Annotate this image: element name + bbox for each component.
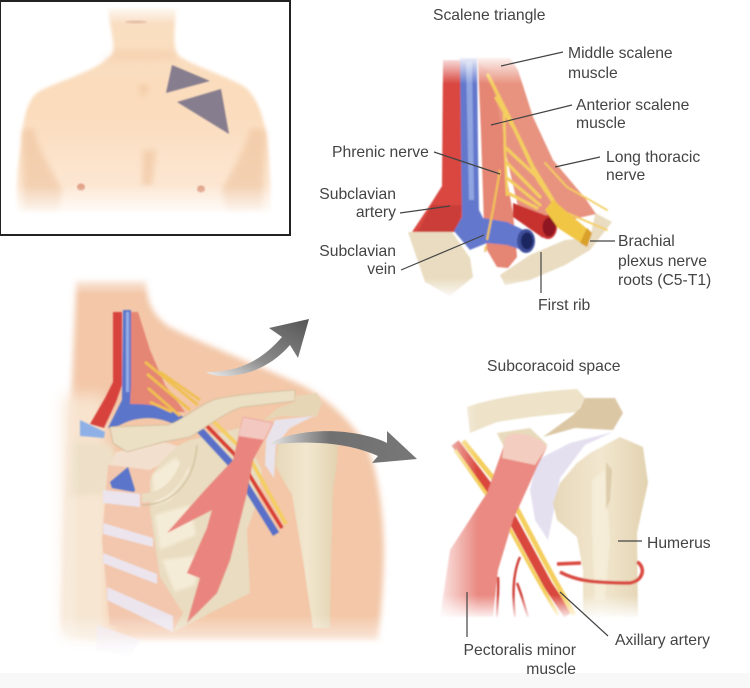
artery opening <box>539 215 557 239</box>
axillary vessels <box>198 420 286 534</box>
label: humerus <box>618 535 711 552</box>
label: axillary artery <box>560 592 710 649</box>
overview nerves <box>145 362 200 416</box>
thoracic wall <box>102 465 185 630</box>
scapula and ribs <box>150 428 262 632</box>
nerve bundle end <box>545 200 592 247</box>
detail glenoid <box>530 432 613 540</box>
heading: scalene triangle: Scalene triangle <box>433 7 546 24</box>
nipples <box>77 184 85 190</box>
label: first rib: First rib <box>538 297 591 314</box>
first rib left <box>408 232 473 296</box>
gap under vein <box>472 248 487 258</box>
phrenic nerve <box>485 170 500 252</box>
chest pale skin <box>62 395 112 640</box>
scalene top fade <box>420 54 530 84</box>
label: pectoralis minor muscle <box>464 592 576 678</box>
anterior scalene muscle <box>478 62 517 268</box>
detail humerus <box>553 437 648 617</box>
vein opening <box>517 229 535 253</box>
label: humerus: Humerus <box>647 535 711 552</box>
subclavian artery <box>412 60 464 232</box>
label: pectoralis minor muscle: muscle <box>526 661 576 678</box>
torso bottom fade <box>5 185 280 219</box>
artery branches <box>497 557 528 617</box>
detail pectoralis minor <box>440 437 547 617</box>
lower sternum <box>64 495 104 640</box>
lips <box>125 20 147 24</box>
brachial plexus roots <box>488 75 607 232</box>
icon: scalene triangle marker <box>166 65 210 93</box>
humerus <box>275 432 338 628</box>
upper coracoid curve <box>142 445 188 498</box>
label: brachial plexus nerve roots: roots (C5-T1) <box>618 272 711 289</box>
axillary artery <box>455 443 568 615</box>
circumflex artery loop <box>557 562 642 583</box>
label: subclavian artery: Subclavian <box>319 186 396 203</box>
blue vessel window <box>110 467 135 492</box>
detail left fade <box>430 385 478 625</box>
arrow: to subcoracoid space <box>271 431 417 463</box>
label: anterior scalene muscle <box>491 97 690 132</box>
cut artery branch <box>513 203 550 238</box>
label: phrenic nerve <box>332 144 500 174</box>
label: long thoracic nerve: nerve <box>606 167 646 184</box>
label: axillary artery: Axillary artery <box>615 632 710 649</box>
label: middle scalene muscle <box>501 45 673 82</box>
sternum <box>70 440 118 498</box>
panel: torso locator inset <box>0 1 290 235</box>
first rib right <box>500 198 612 285</box>
shoulder bottom fade <box>30 615 390 660</box>
neck highlight <box>60 272 170 294</box>
bottom off-white strip <box>0 673 750 688</box>
acromion <box>262 393 322 422</box>
axillary nerves <box>455 441 574 615</box>
upper chest bone <box>110 442 190 470</box>
neck fade <box>100 4 185 24</box>
torso shading <box>22 50 266 212</box>
label: middle scalene muscle: Middle scalene <box>568 45 673 62</box>
label: middle scalene muscle: muscle <box>568 65 618 82</box>
label: brachial plexus nerve roots: Brachial <box>618 233 675 250</box>
rib cartilage <box>96 490 173 656</box>
label: first rib <box>538 252 591 314</box>
label: brachial plexus nerve roots: plexus nerve <box>618 253 707 270</box>
panel: subcoracoid space illustration <box>430 385 648 625</box>
label: long thoracic nerve: Long thoracic <box>606 149 700 166</box>
label: anterior scalene muscle: muscle <box>576 115 626 132</box>
label: pectoralis minor muscle: Pectoralis minor <box>464 642 576 659</box>
detail coracoid <box>497 428 548 460</box>
neck vessels <box>80 310 200 438</box>
shoulder skin <box>62 280 384 640</box>
icon: subcoracoid marker <box>177 89 229 134</box>
heading: subcoracoid space: Subcoracoid space <box>487 358 621 375</box>
detail bottom fade <box>430 595 648 620</box>
shoulder left fade <box>30 270 80 660</box>
scalene bottom fade <box>400 278 570 300</box>
detail clavicle <box>467 389 585 433</box>
label: subclavian artery <box>319 186 450 221</box>
subclavian vein <box>454 58 530 250</box>
label: subclavian vein: vein <box>367 261 396 278</box>
label: subclavian artery: artery <box>356 204 396 221</box>
glenoid <box>265 416 314 478</box>
label: subclavian vein: Subclavian <box>319 243 396 260</box>
torso skin <box>17 8 270 212</box>
arrow: to scalene triangle <box>206 319 309 376</box>
label: brachial plexus nerve roots <box>590 233 711 289</box>
clavicle <box>110 390 295 452</box>
label: phrenic nerve: Phrenic nerve <box>332 144 429 161</box>
label: long thoracic nerve <box>555 149 700 184</box>
panel: shoulder overview illustration <box>30 270 390 660</box>
detail acromion <box>543 398 623 437</box>
pectoralis minor <box>167 417 273 623</box>
label: subclavian vein <box>319 235 484 278</box>
label: anterior scalene muscle: Anterior scalene <box>576 97 690 114</box>
middle scalene muscle <box>477 58 596 222</box>
panel: scalene triangle illustration <box>400 54 612 300</box>
